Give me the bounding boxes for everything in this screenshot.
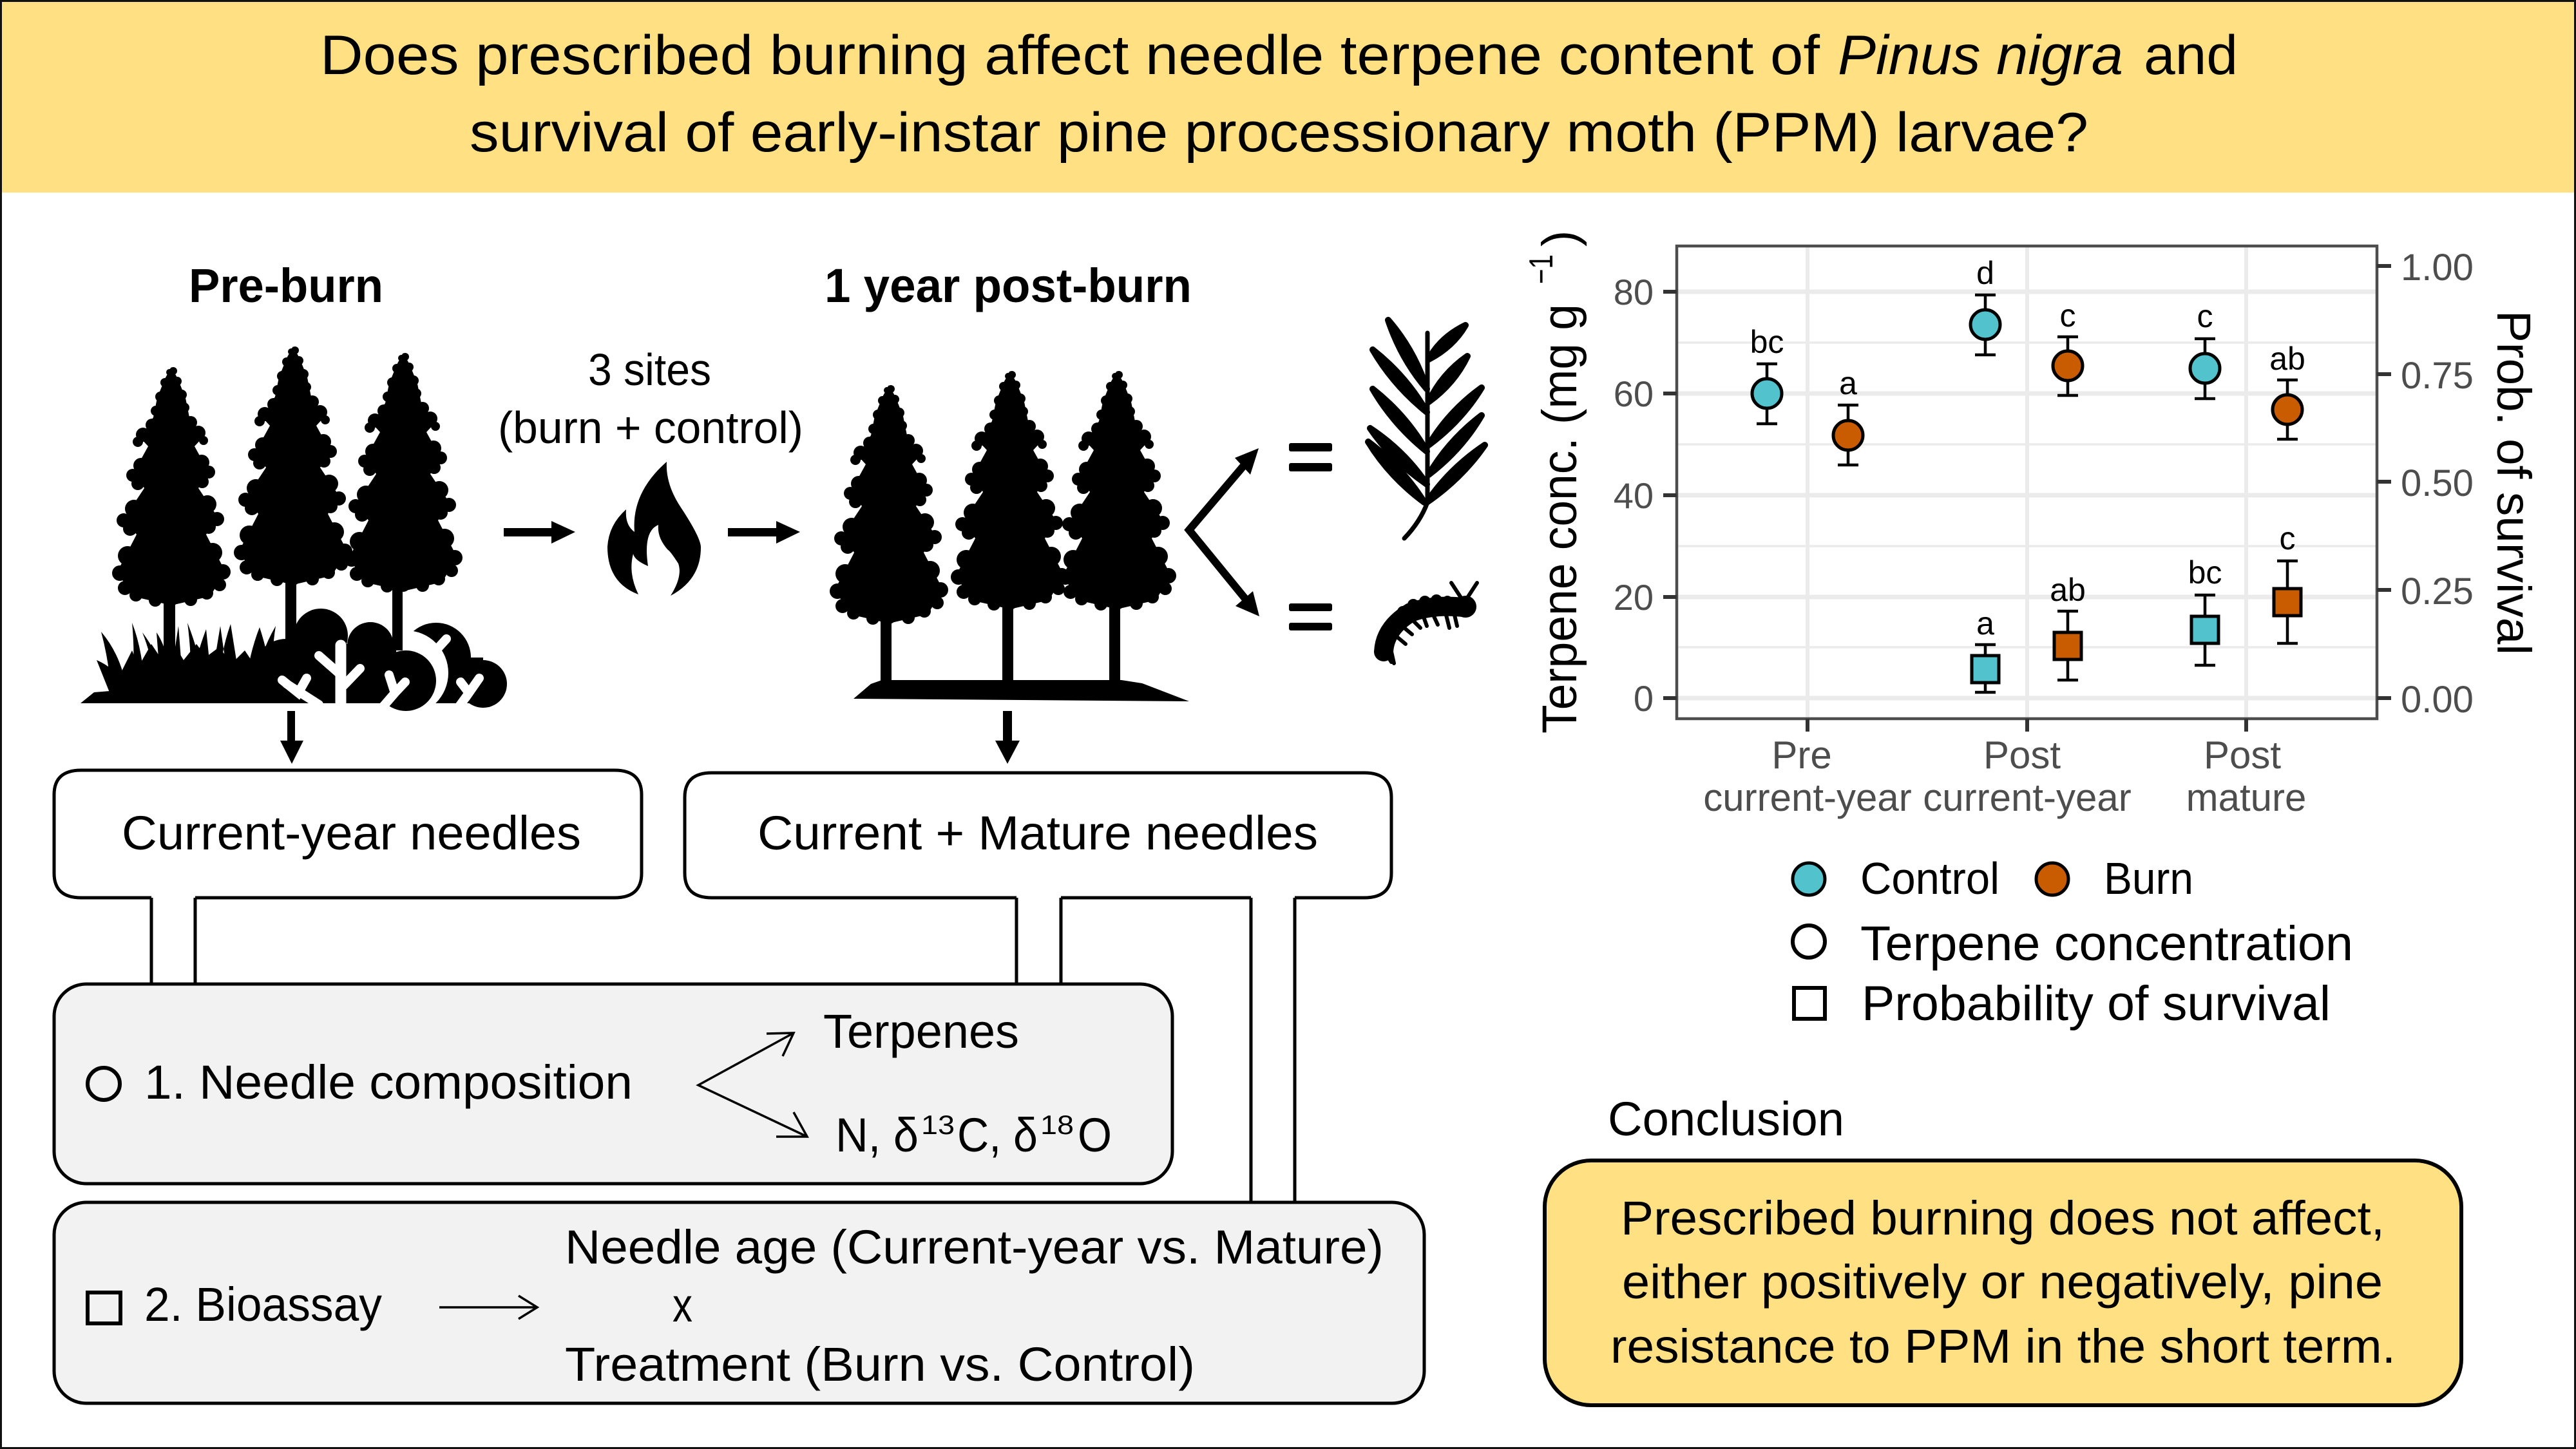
right axis labels: 0.50 xyxy=(2401,462,2474,504)
significance letters: c xyxy=(2279,520,2296,556)
title banner: survival of early-instar pine processionary moth (PPM) larvae? xyxy=(470,102,2088,164)
text: 3 sites xyxy=(498,345,803,453)
text: 3 sites: (burn + control) xyxy=(498,402,803,453)
panel: needle composition: Terpenes xyxy=(823,1005,1019,1058)
left axis labels: 80 xyxy=(1614,272,1654,312)
icon: caterpillar larva xyxy=(1384,583,1477,663)
left axis title: −1 xyxy=(1523,254,1560,284)
panel: needle composition: 18 xyxy=(1040,1110,1074,1140)
panel: bioassay xyxy=(54,1202,1424,1403)
heading: 1 year post-burn: 1 year post-burn xyxy=(825,259,1192,312)
chart gridlines and frame xyxy=(1663,246,2391,732)
title banner: and xyxy=(2144,24,2238,86)
significance letters: d xyxy=(1976,255,1994,291)
left axis labels xyxy=(1614,272,1654,719)
arrow: fire to post-burn forest xyxy=(728,521,800,544)
arrows: branching to needle and larva xyxy=(1189,448,1259,616)
x axis labels: current-year xyxy=(1703,776,1912,819)
callout: conclusion xyxy=(1545,1160,2461,1405)
right axis labels: 0.00 xyxy=(2401,679,2474,721)
legend: Terpene concentration xyxy=(1860,916,2353,971)
data points: terpene circles xyxy=(1752,310,2302,450)
significance letters: c xyxy=(2197,298,2213,334)
significance letters: a xyxy=(1839,365,1857,401)
right axis title: Prob. of survival xyxy=(2487,310,2541,655)
connectors between sample boxes and analyses xyxy=(151,895,1295,1204)
title banner: Does prescribed burning affect needle terpene content of xyxy=(320,24,1820,86)
x axis labels: Post xyxy=(1983,734,2061,777)
panel: bioassay: Needle age (Current-year vs. Mature) xyxy=(565,1220,1384,1274)
left axis title: Terpene conc. (mg g xyxy=(1532,304,1587,734)
title banner: Pinus nigra xyxy=(1838,24,2123,86)
arrow: forest to fire xyxy=(504,521,575,544)
legend: Burn xyxy=(2104,853,2193,904)
x axis labels: mature xyxy=(2186,776,2306,819)
icon: flame xyxy=(607,462,701,596)
callout: conclusion: resistance to PPM in the short term. xyxy=(1610,1320,2396,1373)
x axis labels: Pre xyxy=(1771,734,1832,777)
legend: Probability of survival xyxy=(1862,976,2331,1031)
panel: bioassay: Treatment (Burn vs. Control) xyxy=(565,1338,1195,1391)
arrow: pre-burn to needles xyxy=(280,711,303,764)
panel: needle composition xyxy=(54,984,1172,1184)
right axis labels: 1.00 xyxy=(2401,247,2474,289)
right axis labels: 0.25 xyxy=(2401,571,2474,612)
box: current + mature needles xyxy=(685,773,1391,898)
panel: needle composition: C, δ xyxy=(957,1108,1038,1162)
x axis labels xyxy=(1703,734,2306,819)
legend xyxy=(1793,853,2353,1031)
right axis labels: 0.75 xyxy=(2401,355,2474,397)
error bars xyxy=(1757,295,2298,692)
text: 3 sites: 3 sites xyxy=(588,345,711,395)
box: current-year needles: Current-year needles xyxy=(122,806,581,860)
significance letters: c xyxy=(2060,298,2075,334)
x axis labels: current-year xyxy=(1923,776,2132,819)
box: current-year needles xyxy=(54,770,642,898)
left axis labels: 40 xyxy=(1614,475,1654,516)
box: current + mature needles: Current + Mature needles xyxy=(758,806,1318,860)
equals signs xyxy=(1289,443,1332,630)
icon: post-burn forest xyxy=(830,371,1189,701)
significance letters: bc xyxy=(1750,324,1784,360)
panel: bioassay: 2. Bioassay xyxy=(144,1278,382,1331)
right axis labels xyxy=(2401,247,2474,721)
panel: needle composition: N, δ xyxy=(835,1108,919,1162)
legend: Control xyxy=(1860,853,1999,904)
left axis title: ) xyxy=(1532,231,1587,247)
icon: pre-burn forest with grass and shrubs xyxy=(81,346,507,715)
callout: conclusion: Prescribed burning does not affect, xyxy=(1621,1191,2385,1245)
heading: Pre-burn: Pre-burn xyxy=(189,259,383,312)
x axis labels: Post xyxy=(2204,734,2281,777)
significance letters: ab xyxy=(2269,341,2305,377)
panel: needle composition: 1. Needle composition xyxy=(144,1056,633,1109)
panel: needle composition: O xyxy=(1078,1108,1112,1162)
title banner xyxy=(2,2,2574,193)
significance letters: a xyxy=(1976,605,1994,641)
callout: conclusion: either positively or negatively, pine xyxy=(1622,1255,2383,1309)
significance letters: bc xyxy=(2188,554,2222,591)
left axis labels: 0 xyxy=(1634,678,1654,719)
left axis labels: 20 xyxy=(1614,577,1654,618)
significance letters xyxy=(1750,255,2305,641)
icon: pine needle sprig xyxy=(1368,320,1485,538)
chart: terpene concentration and probability of survival xyxy=(1523,231,2541,819)
data points: survival squares xyxy=(1972,589,2301,683)
significance letters: ab xyxy=(2050,572,2086,608)
left axis labels: 60 xyxy=(1614,374,1654,414)
panel: bioassay: x xyxy=(673,1278,692,1332)
arrow: post-burn to needles xyxy=(995,711,1020,764)
panel: needle composition: 13 xyxy=(921,1110,955,1140)
heading: conclusion: Conclusion xyxy=(1608,1092,1844,1146)
